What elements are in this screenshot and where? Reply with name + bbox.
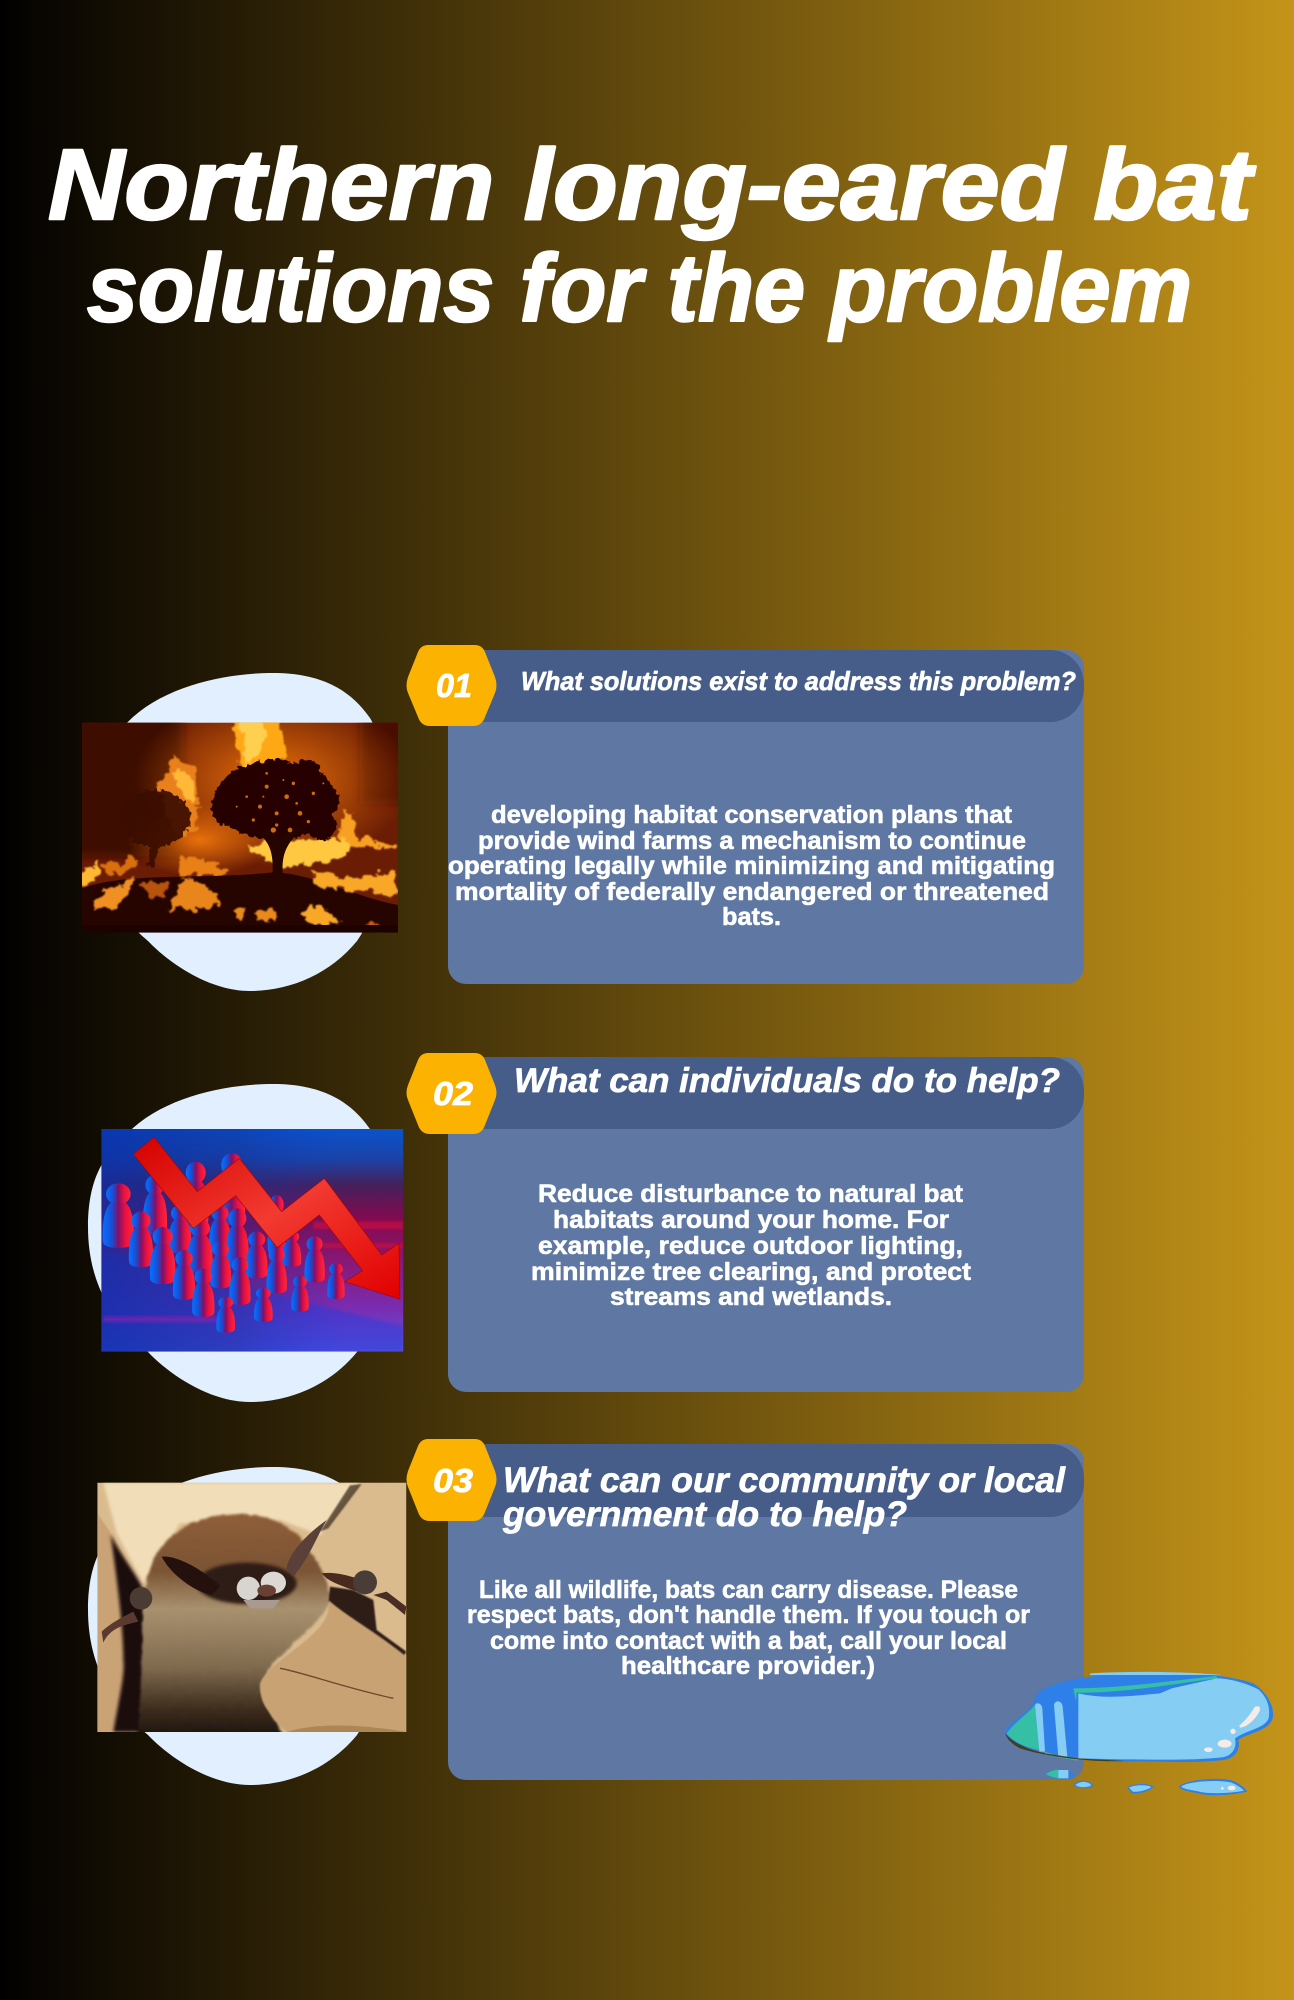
body text: Reduce disturbance to natural bat [538,1180,964,1208]
body text: minimize tree clearing, and protect [531,1258,972,1286]
body text: bats. [722,903,781,931]
heading: What can our community or local [503,1461,1066,1500]
panel header bar [448,1057,1084,1129]
title: solutions for the problem [87,235,1192,342]
body text: operating legally while minimizing and mitigating [448,852,1055,880]
number badge 01: 01 [436,667,472,704]
body text [467,1576,1030,1680]
panel: individuals [406,1053,1084,1392]
number badge 03: 03 [433,1462,473,1499]
body text: respect bats, don't handle them. If you touch or [467,1601,1030,1629]
body text: habitats around your home. For [553,1206,949,1234]
title [48,129,1256,342]
panel body [448,1444,1084,1780]
body text [448,801,1055,931]
number badge 01 [406,645,496,726]
heading: government do to help? [502,1495,907,1534]
image: wildfire with tree silhouette [82,722,398,933]
body text [531,1180,972,1311]
blob behind chart photo [88,1084,389,1402]
body text: provide wind farms a mechanism to continue [478,827,1026,855]
panel body [448,650,1084,984]
number badge 02: 02 [433,1075,474,1112]
title: Northern long-eared bat [48,129,1256,241]
panel: solutions [406,645,1084,984]
panel: community [406,1439,1084,1780]
number badge 03 [406,1439,496,1521]
heading: What solutions exist to address this problem? [521,666,1076,696]
image: bat with white-nose syndrome [97,1483,406,1740]
panel header bar [448,650,1084,722]
panel body [448,1057,1084,1392]
body text: mortality of federally endangered or threatened [455,878,1049,906]
body text: come into contact with a bat, call your local [490,1627,1007,1655]
body text: Like all wildlife, bats can carry disease. Please [479,1576,1018,1604]
illustration: melting ice and droplets [1005,1672,1273,1795]
panel header bar [448,1444,1084,1517]
heading: What can individuals do to help? [514,1062,1060,1100]
blob behind fire photo [88,673,389,991]
blob behind bat photo [88,1467,389,1785]
heading [502,1461,1066,1534]
body text: healthcare provider.) [621,1652,875,1680]
number badge 02 [406,1053,496,1134]
body text: developing habitat conservation plans that [491,801,1013,829]
body text: streams and wetlands. [610,1283,892,1311]
image: red falling arrow over pawns [101,1129,403,1352]
body text: example, reduce outdoor lighting, [538,1232,963,1260]
